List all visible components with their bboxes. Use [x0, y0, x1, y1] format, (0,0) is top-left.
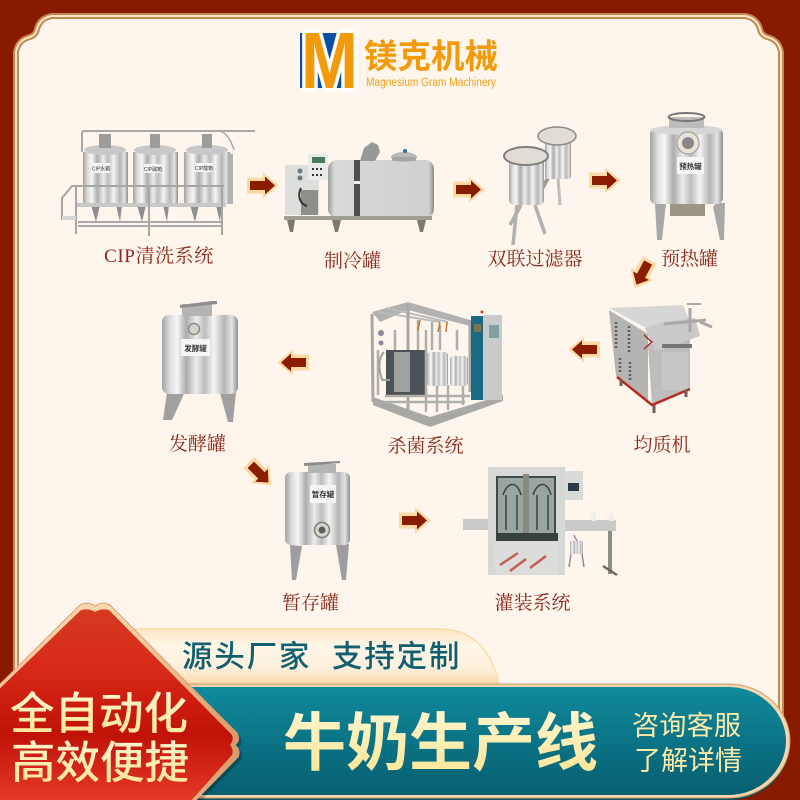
- machine: filling system: [463, 467, 617, 575]
- label: duplex filter: 双联过滤器: [487, 248, 583, 270]
- tab text right: 支持定制: [332, 640, 461, 674]
- machine: homogenizer: [609, 304, 712, 413]
- arrow 8: [399, 508, 431, 534]
- machine: preheat tank: [650, 113, 725, 240]
- details text: 了解详情: [634, 746, 742, 776]
- label: homogenizer: 均质机: [633, 434, 691, 456]
- badge line 1: 全自动化: [10, 690, 188, 739]
- tab text left: 源头厂家: [182, 640, 311, 674]
- machine: holding tank: 暂存罐: [312, 489, 335, 499]
- machine: CIP cleaning system: [62, 131, 255, 236]
- logo mark: M: [301, 16, 358, 105]
- machine: CIP cleaning system: CIP碱箱: [144, 166, 162, 173]
- machine: CIP cleaning system: CIP酸箱: [195, 165, 213, 172]
- tab: source factory: [130, 629, 499, 685]
- arrow 4: [623, 254, 661, 294]
- arrow 6: [277, 350, 309, 376]
- label: fermentation tank: 发酵罐: [169, 433, 226, 455]
- arrow 5: [568, 336, 600, 362]
- machine: duplex filter: [504, 127, 576, 245]
- machine: holding tank: [285, 461, 350, 580]
- machine: fermentation tank: 发酵罐: [184, 343, 207, 353]
- label: filling system: 灌装系统: [494, 592, 571, 614]
- badge line 2: 高效便捷: [11, 739, 189, 788]
- machine: preheat tank: 预热罐: [679, 161, 702, 171]
- machine: sterilization system: [372, 302, 503, 427]
- consult text: 咨询客服: [632, 711, 741, 741]
- banner title: 牛奶生产线: [283, 709, 598, 779]
- label: CIP cleaning system: CIP清洗系统: [104, 245, 214, 267]
- arrow 3: [589, 168, 621, 194]
- label: holding tank: 暂存罐: [282, 592, 339, 614]
- machine: CIP cleaning system: CIP水箱: [92, 166, 110, 172]
- arrow 2: [453, 176, 485, 202]
- company name: 镁克机械: [364, 39, 498, 76]
- label: cooling tank: 制冷罐: [324, 250, 381, 272]
- arrow 1: [247, 172, 279, 198]
- logo: [300, 16, 498, 105]
- label: preheat tank: 预热罐: [661, 248, 718, 270]
- machine: cooling tank: [284, 142, 434, 232]
- company name english: Magnesium Gram Machinery: [366, 77, 496, 89]
- label: sterilization system: 杀菌系统: [387, 435, 464, 457]
- arrow 7: [239, 453, 281, 495]
- red diamond badge: [0, 603, 242, 800]
- teal banner: [150, 684, 790, 800]
- machine: fermentation tank: [162, 301, 238, 422]
